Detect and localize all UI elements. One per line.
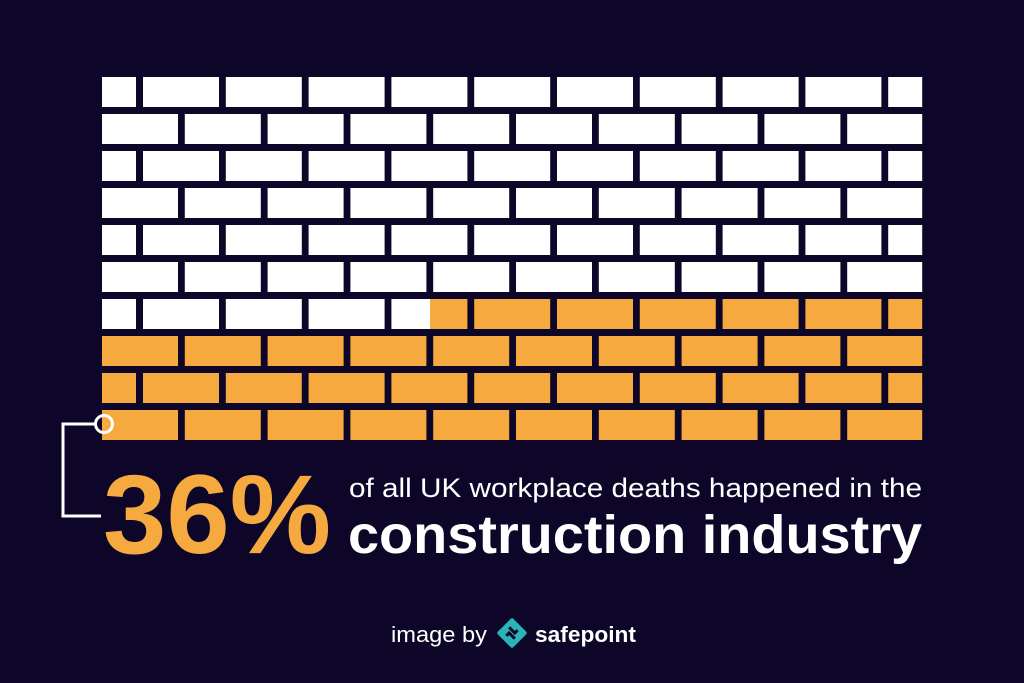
icon: safepoint logo [496, 617, 528, 649]
credit text: image by [391, 622, 487, 647]
big stat: 36%: 36% [103, 452, 331, 577]
brick wall [102, 77, 922, 440]
orange bricks (36%) [102, 299, 922, 440]
white bricks [102, 77, 922, 329]
brand name: safepoint [535, 622, 637, 647]
callout bracket connector [63, 416, 112, 516]
stat description line 1: of all UK workplace deaths happened in the [349, 473, 922, 503]
footer credit [391, 617, 637, 649]
stat description line 2: construction industry [348, 505, 922, 565]
